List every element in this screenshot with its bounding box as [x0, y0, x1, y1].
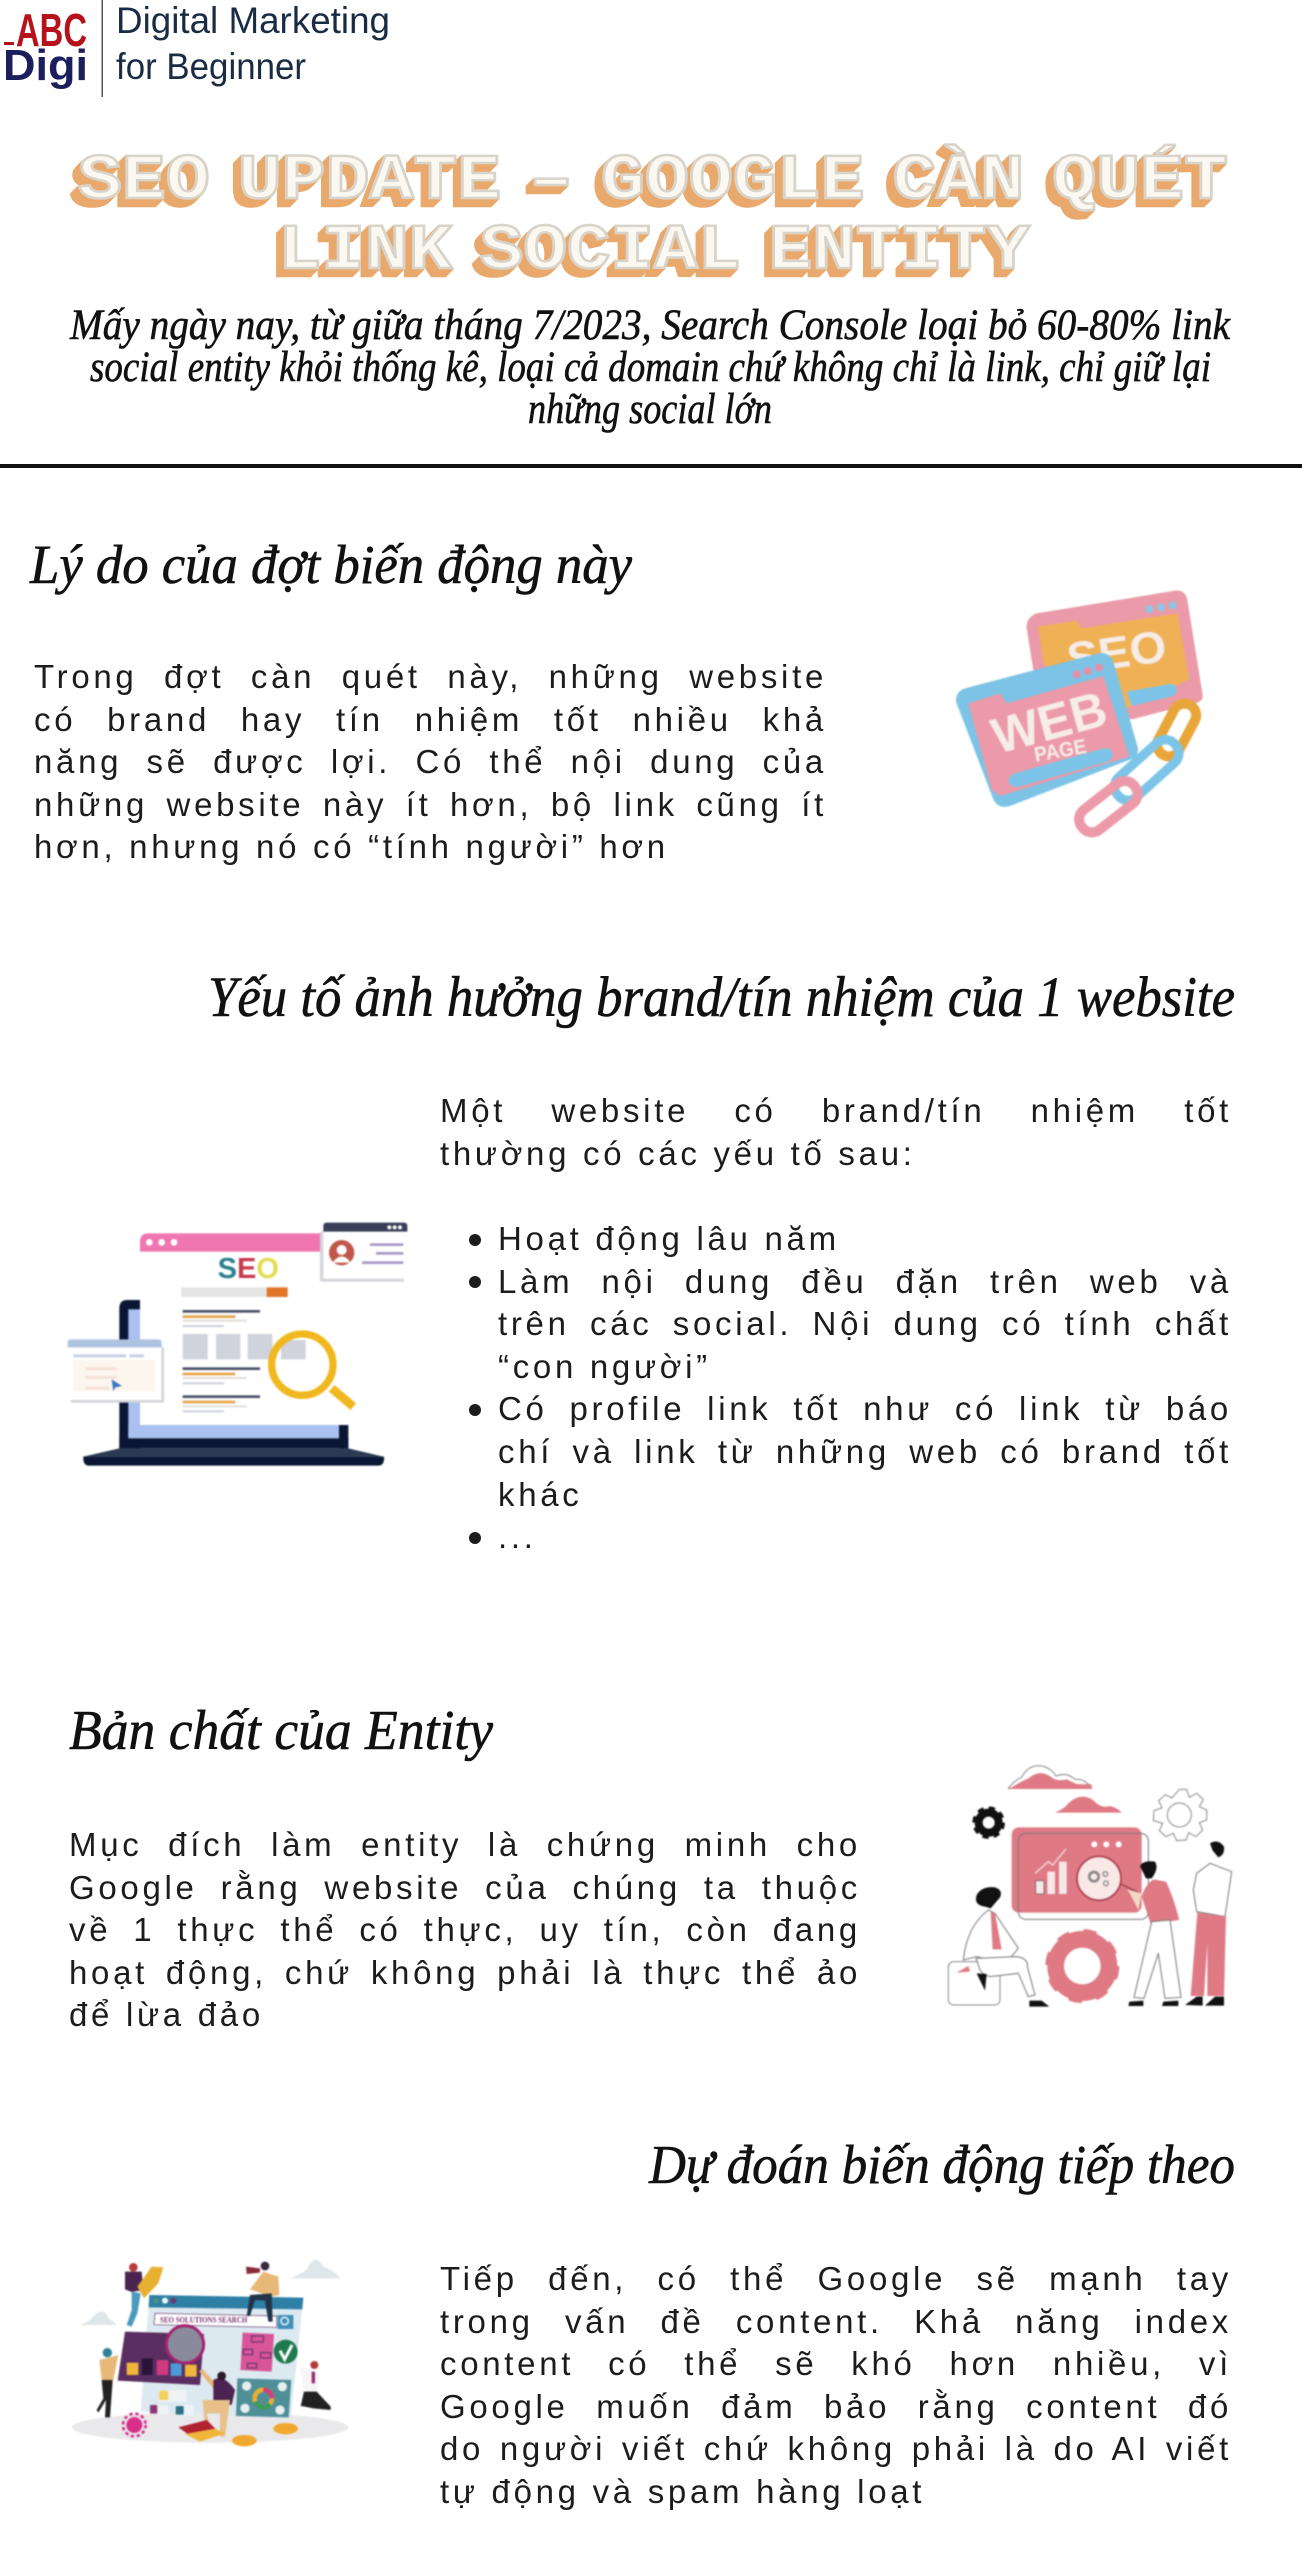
gears	[975, 1789, 1207, 1999]
text block: entity: Mục đích làm entity là chứng minh cho	[69, 1826, 861, 1863]
bullet list: brand factors	[469, 1220, 1232, 1555]
bullet list: brand factors: trên các social. Nội dung có tính chất	[498, 1305, 1232, 1342]
person thinking	[1185, 1841, 1232, 2006]
check badge	[274, 2340, 298, 2364]
text block: brand intro	[440, 1092, 1232, 1172]
chain links	[1074, 700, 1200, 837]
title	[70, 143, 1228, 288]
text block: reason: có brand hay tín nhiệm tốt nhiều khả	[34, 701, 827, 738]
bullet list: brand factors: ...	[498, 1518, 537, 1555]
seo label: SEO	[218, 1253, 279, 1285]
text block: entity	[69, 1826, 861, 2033]
purple chart panel	[118, 2326, 204, 2385]
text block: brand intro: thường có các yếu tố sau:	[440, 1135, 916, 1172]
icon: web page and seo cards linked by a chain	[955, 590, 1204, 838]
bullet dots	[469, 1234, 481, 1544]
search bar	[181, 1287, 288, 1297]
logo mark: ABC Digi: Digi	[3, 41, 88, 90]
text block: entity: hoạt động, chứ không phải là thực thể ảo	[69, 1954, 861, 1991]
bullet list: brand factors: khác	[498, 1476, 583, 1513]
seated person	[948, 1887, 1049, 2007]
text block: prediction: content có thể sẽ khó hơn nhiều, vì	[440, 2345, 1232, 2382]
heading: Yếu tố ảnh hưởng brand/tín nhiệm của 1 website: Yếu tố ảnh hưởng brand/tín nhiệm của 1 website	[208, 966, 1235, 1029]
left window	[68, 1339, 164, 1403]
flowchart card	[240, 2333, 274, 2372]
seo card: SEO	[1064, 620, 1170, 685]
browser window: SEO SOLUTIONS SEARCH	[160, 2314, 248, 2324]
text block: reason: hơn, nhưng nó có “tính người” hơn	[34, 828, 669, 865]
text block: entity: Google rằng website của chúng ta thuộc	[69, 1869, 861, 1906]
web page card: PAGE	[1032, 735, 1088, 767]
header divider	[0, 464, 1302, 468]
teal analytics panel	[236, 2378, 291, 2417]
icon: team analysing data	[946, 1764, 1233, 2008]
text block: prediction: Google muốn đảm bảo rằng content đó	[440, 2388, 1232, 2425]
text block: entity: để lừa đảo	[69, 1996, 264, 2033]
heading: Bản chất của Entity: Bản chất của Entity	[69, 1700, 493, 1762]
logo	[3, 0, 390, 97]
text block: reason: Trong đợt càn quét này, những website	[34, 658, 827, 695]
subtitle	[69, 302, 1231, 433]
text block: prediction: do người viết chứ không phải là do AI viết	[440, 2430, 1232, 2467]
browser bar	[140, 1233, 327, 1252]
text block: reason: những website này ít hơn, bộ link cũng ít	[34, 786, 827, 823]
browser window	[141, 2295, 303, 2418]
heading: Lý do của đợt biến động này: Lý do của đợt biến động này	[29, 534, 633, 595]
bullet list: brand factors: chí và link từ những web có brand tốt	[498, 1433, 1232, 1470]
text block: prediction	[440, 2260, 1232, 2510]
bullet list: brand factors: Hoạt động lâu năm	[498, 1220, 840, 1257]
search results	[183, 1310, 306, 1412]
text block: prediction: tự động và spam hàng loạt	[440, 2473, 925, 2510]
logo tagline: Digital Marketing	[116, 0, 390, 41]
web page card	[956, 653, 1138, 807]
bullet list: brand factors: Có profile link tốt như có link từ báo	[498, 1390, 1232, 1427]
bullet list: brand factors: Làm nội dung đều đặn trên web và	[498, 1263, 1232, 1300]
text block: prediction: Tiếp đến, có thể Google sẽ mạnh tay	[440, 2260, 1232, 2297]
analytics screen	[1012, 1827, 1148, 1919]
person with magnifier	[1127, 1861, 1181, 2006]
icon: laptop seo search	[66, 1222, 408, 1467]
text block: prediction: trong vấn đề content. Khả năng index	[440, 2303, 1232, 2340]
logo tagline	[116, 0, 390, 87]
heading: Dự đoán biến động tiếp theo: Dự đoán biến động tiếp theo	[648, 2134, 1235, 2195]
subtitle: những social lớn	[528, 386, 772, 433]
clouds	[1008, 1766, 1122, 1813]
laptop	[83, 1252, 384, 1466]
seo card	[1027, 591, 1203, 719]
logo tagline: for Beginner	[116, 46, 306, 87]
title line 1: SEO UPDATE – GOOGLE CÀN QUÉT	[78, 144, 1228, 218]
magnifier	[272, 1334, 353, 1407]
logo mark: ABC Digi: ABC	[16, 4, 87, 56]
logo mark: ABC Digi	[3, 4, 88, 90]
bullet list: brand factors: “con người”	[498, 1348, 711, 1385]
coins, gear and book	[123, 2414, 298, 2446]
small tiles	[150, 2390, 193, 2416]
ground and clouds	[72, 2260, 348, 2443]
text block: reason	[34, 658, 827, 865]
web page card: WEB	[986, 680, 1113, 765]
profile window	[320, 1223, 407, 1282]
text block: reason: năng sẽ được lợi. Có thể nội dung của	[34, 743, 827, 780]
title line 2: LINK SOCIAL ENTITY	[278, 216, 1031, 288]
text block: brand intro: Một website có brand/tín nhiệm tốt	[440, 1092, 1232, 1129]
people	[97, 2262, 331, 2437]
text block: entity: về 1 thực thể có thực, uy tín, còn đang	[69, 1911, 861, 1948]
icon: seo solutions search team	[72, 2260, 348, 2448]
